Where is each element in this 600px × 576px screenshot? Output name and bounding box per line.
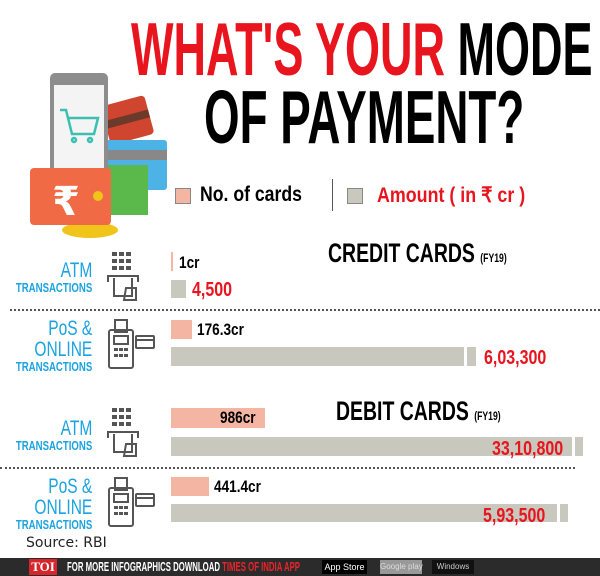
icon: ATM debit [107,408,139,457]
legend: No. of cards [200,183,302,206]
icon: PoS debit [108,477,155,527]
bars: credit ATM [171,252,232,301]
heading: credit cards: CREDIT CARDS (FY19) [328,238,507,268]
bars: debit ATM: 33,10,800 [492,438,563,460]
label: debit PoS: ONLINE [34,496,92,519]
label: debit PoS: PoS & [48,475,92,498]
footer bar: Windows [437,562,469,571]
footer bar: FOR MORE INFOGRAPHICS DOWNLOAD TIMES OF INDIA APP [67,559,300,574]
bars: debit PoS [171,477,568,527]
icon: phone cards wallet: ₹ [52,179,80,225]
icon: PoS [108,319,155,369]
bars: credit ATM: 1cr [179,253,199,272]
legend [175,179,525,211]
label: credit ATM [16,259,92,295]
label: debit ATM [16,417,92,453]
source: Source: RBI [26,535,107,551]
title line 2: OF PAYMENT? [204,75,524,159]
footer bar: App Store [324,562,365,572]
bars: debit PoS: 441.4cr [214,477,261,496]
label: debit ATM: ATM [60,417,92,440]
label: credit PoS: ONLINE [34,338,92,361]
footer bar: TOI [31,559,55,574]
bars: credit PoS: 176.3cr [197,320,244,339]
icon: phone cards wallet [30,73,167,238]
label: credit ATM: TRANSACTIONS [16,280,92,295]
label: credit PoS: PoS & [48,317,92,340]
title: WHAT'S YOUR MODE [131,7,593,91]
bars: credit ATM: 4,500 [192,279,232,301]
bars: debit ATM: 986cr [220,408,256,427]
icon: ATM [107,252,139,301]
label: debit PoS: TRANSACTIONS [16,517,92,532]
footer bar: Google play [380,562,423,571]
bars: credit PoS [171,320,546,369]
label: credit PoS: TRANSACTIONS [16,359,92,374]
heading: debit cards: DEBIT CARDS (FY19) [336,396,501,426]
footer bar [0,558,600,576]
bars: debit PoS: 5,93,500 [483,505,545,527]
legend: Amount ( in ₹ cr ) [377,184,525,207]
label: debit ATM: TRANSACTIONS [16,438,92,453]
label: debit PoS [16,475,92,532]
label: credit ATM: ATM [60,259,92,282]
bars: debit ATM [171,408,583,460]
bars: credit PoS: 6,03,300 [484,347,546,369]
label: credit PoS [16,317,92,374]
